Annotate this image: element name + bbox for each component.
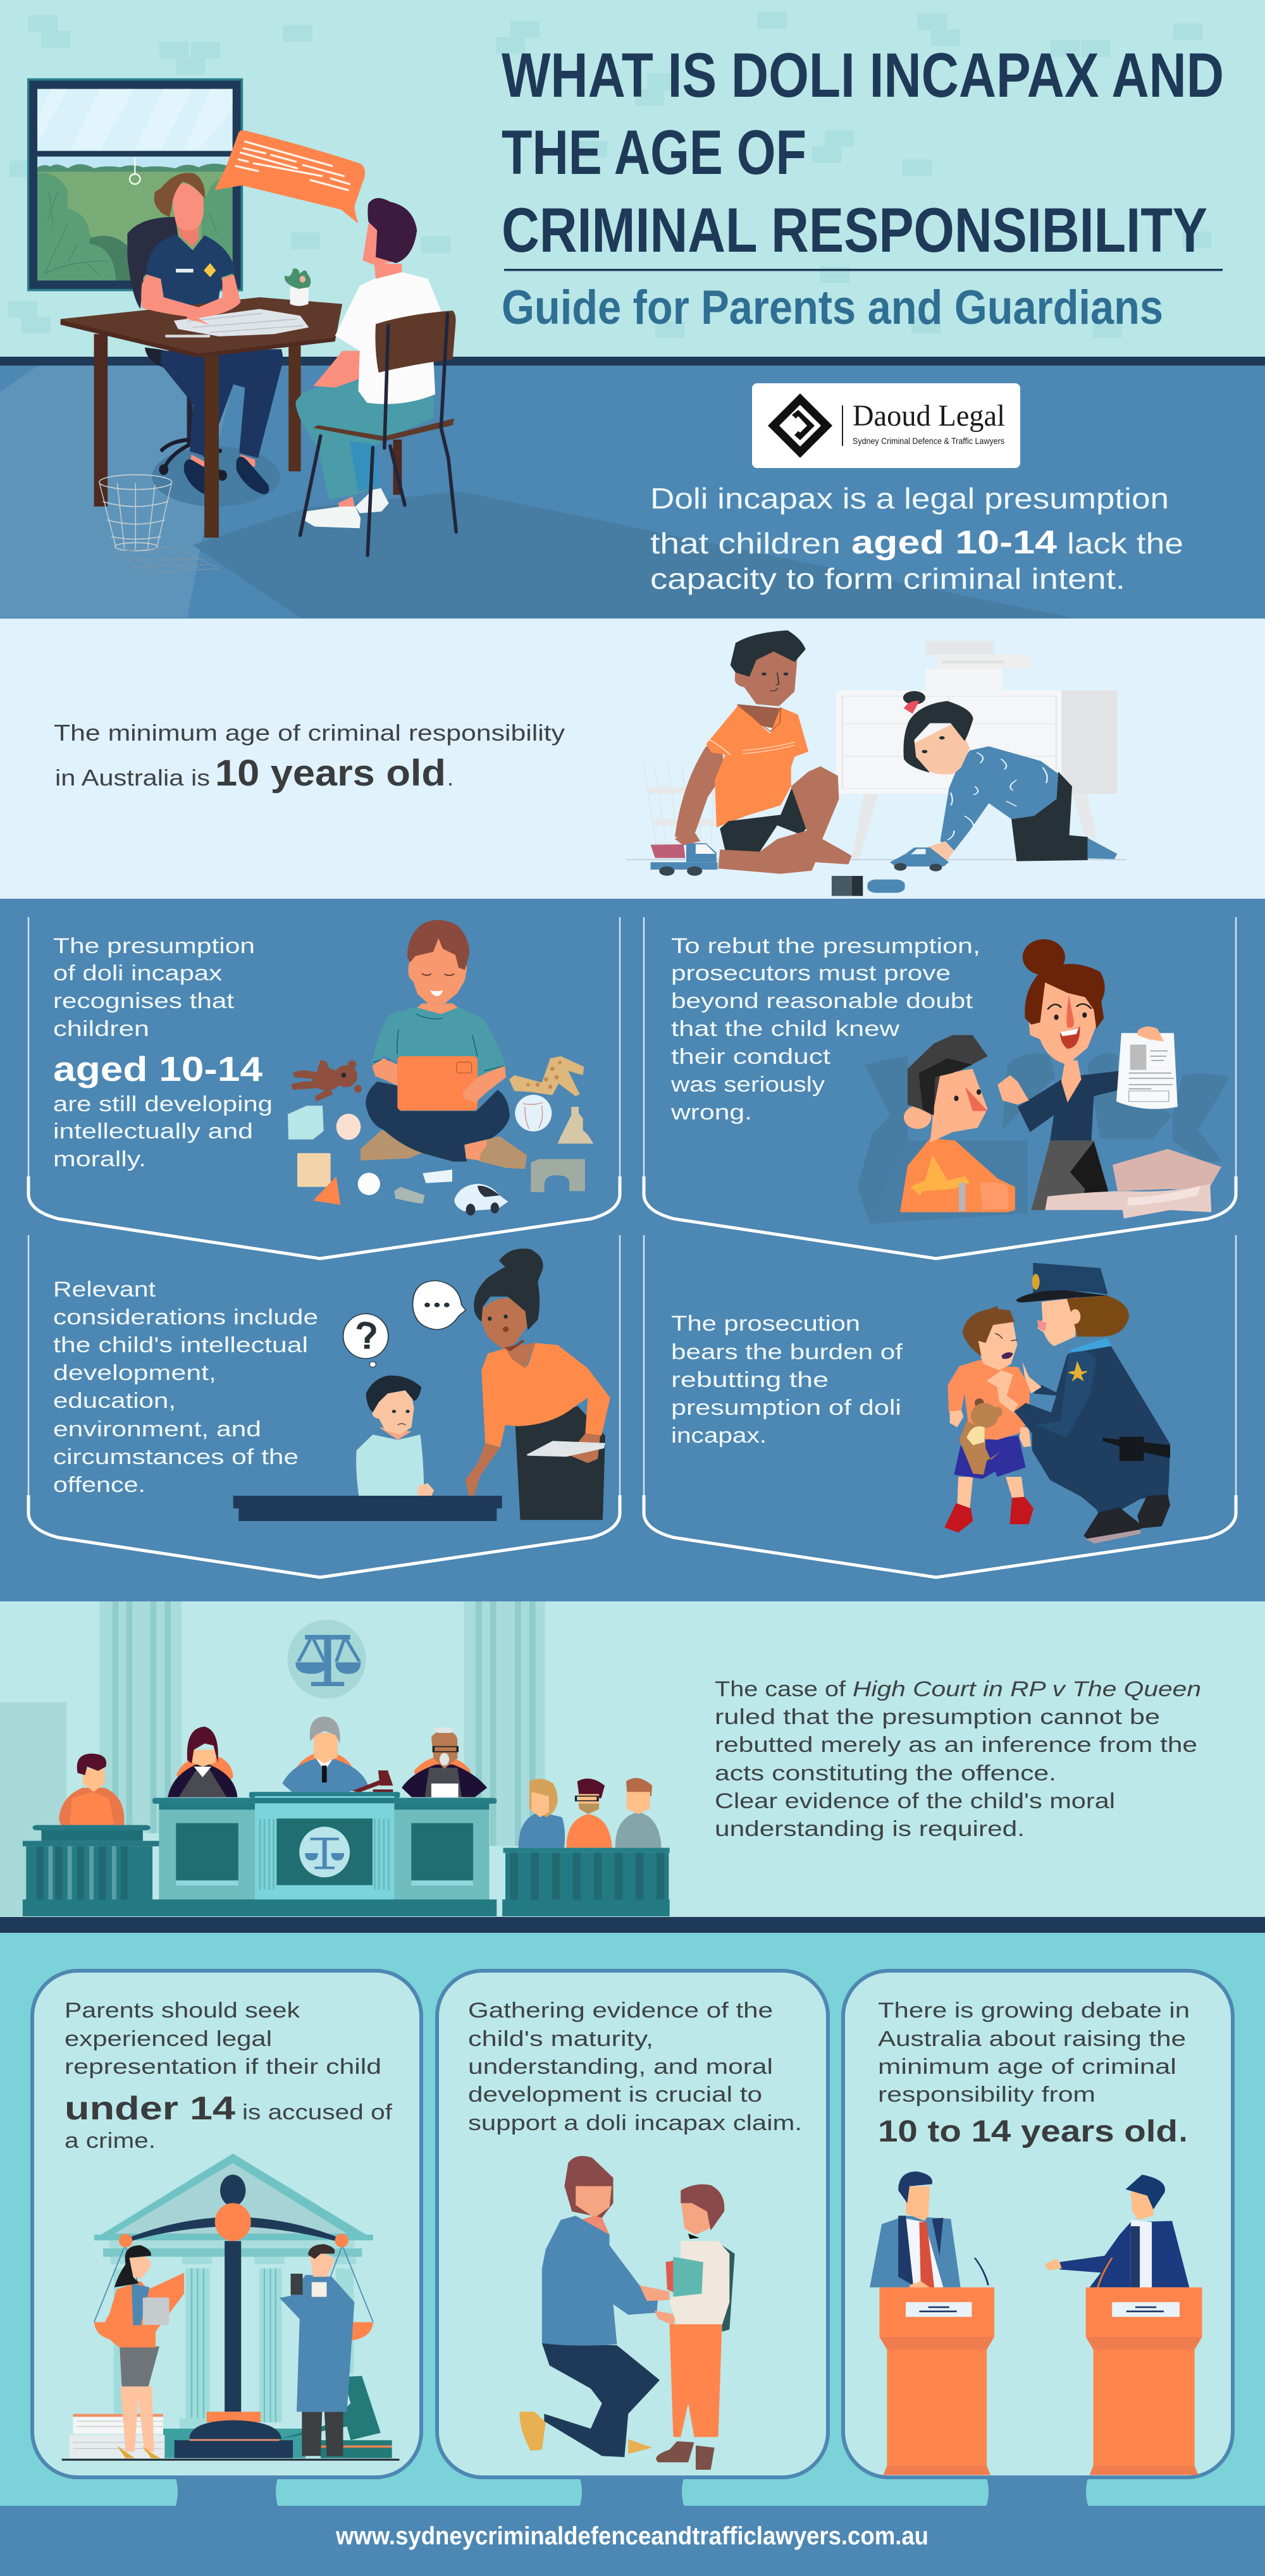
text: to rebut: To rebut the presumption, xyxy=(671,934,980,958)
text: presumption: The presumption xyxy=(53,934,255,958)
illustration: scales of justice with lawyers xyxy=(62,2154,399,2461)
illustration: teacher and student xyxy=(233,1248,610,1521)
text: minimum age of criminal responsibility: in Australia is xyxy=(55,765,210,791)
panel: minimum age xyxy=(0,619,1265,899)
card: rebutting the presumption xyxy=(644,917,1236,1259)
text: to rebut xyxy=(670,934,980,1125)
text: presumption: aged 10-14 xyxy=(53,1049,262,1088)
witness xyxy=(23,1754,160,1900)
speaker one xyxy=(870,2171,988,2288)
card: gather evidence xyxy=(437,1971,828,2477)
subtitle: Guide for Parents and Guardians xyxy=(502,281,1163,335)
text: to rebut: their conduct xyxy=(671,1045,831,1069)
text: High Court in RP v The Queen: acts constituting the offence. xyxy=(715,1761,1056,1785)
text: parents should seek: Parents should seek xyxy=(65,1999,300,2023)
text: relevant considerations: environment, and xyxy=(53,1417,261,1441)
card: growing debate xyxy=(843,1971,1233,2477)
text: doli incapax definition xyxy=(650,482,1183,595)
text: minimum age of criminal responsibility: . xyxy=(447,765,454,791)
card: seek legal representation xyxy=(32,1971,421,2477)
text: minimum age of criminal responsibility: 10 years old xyxy=(215,753,446,794)
text: gathering evidence: development is crucial to xyxy=(468,2083,762,2107)
card: presumption recognises development xyxy=(28,917,620,1259)
furniture xyxy=(626,641,1127,860)
text: parents should seek xyxy=(65,1999,393,2153)
text: prosecution burden: The prosecution xyxy=(671,1312,860,1336)
boy xyxy=(675,631,852,874)
text: minimum age of criminal responsibility xyxy=(54,720,565,794)
text: gathering evidence: Gathering evidence of the xyxy=(468,1999,773,2023)
text: High Court in RP v The Queen: ruled that the presumption cannot be xyxy=(715,1705,1160,1729)
text: to rebut: that the child knew xyxy=(671,1017,900,1041)
text: High Court in RP v The Queen xyxy=(715,1677,1201,1841)
text: growing debate: minimum age of criminal xyxy=(878,2055,1176,2079)
illustrations: lower cards xyxy=(62,2154,1202,2475)
officer xyxy=(987,1263,1170,1544)
logo: Daoud Legal: Daoud Legal xyxy=(853,399,1005,433)
text: growing debate: responsibility from xyxy=(878,2083,1095,2107)
panel: High Court case xyxy=(0,1601,1265,1933)
illustration: boy with tablet and toys xyxy=(288,920,593,1216)
title xyxy=(502,40,1224,271)
text: prosecution burden: bears the burden of xyxy=(671,1340,903,1364)
text: doli incapax definition: capacity to form criminal intent. xyxy=(650,562,1125,595)
columns and wall xyxy=(0,1601,545,1916)
text: growing debate: . xyxy=(1179,2115,1187,2148)
text: gathering evidence: understanding, and moral xyxy=(468,2055,773,2079)
speech bubble: question xyxy=(343,1314,388,1367)
judges' bench xyxy=(23,1792,497,1916)
text: growing debate xyxy=(878,1999,1190,2148)
jury xyxy=(502,1778,670,1916)
illustration: parent and child with book xyxy=(519,2156,735,2470)
speaker two xyxy=(1044,2174,1189,2288)
teddy bear xyxy=(960,1398,1003,1475)
speech bubble xyxy=(214,130,365,224)
text: relevant considerations: development, xyxy=(53,1361,216,1385)
panel: parents and debate cards xyxy=(0,1933,1265,2507)
man in chair xyxy=(296,198,456,555)
text: presumption: morally. xyxy=(53,1147,146,1171)
text: to rebut: beyond reasonable doubt xyxy=(671,989,973,1013)
text: growing debate: 10 to 14 years old xyxy=(878,2115,1178,2148)
text: prosecution burden: incapax. xyxy=(671,1424,767,1448)
text: growing debate: Australia about raising the xyxy=(878,2027,1186,2051)
text: High Court in RP v The Queen: Clear evidence of the child's moral xyxy=(715,1789,1115,1813)
text: gathering evidence xyxy=(468,1999,802,2135)
card: relevant considerations xyxy=(28,1235,620,1577)
illustration: courtroom xyxy=(0,1601,670,1916)
text: parents should seek: representation if their child xyxy=(65,2055,381,2079)
text: relevant considerations: offence. xyxy=(53,1473,145,1497)
text: doli incapax definition: aged 10-14 xyxy=(851,524,1057,561)
speech bubble: dots xyxy=(413,1281,466,1329)
logo: Daoud Legal: Sydney Criminal Defence & Traffic Lawyers xyxy=(853,436,1004,446)
text: relevant considerations: circumstances of the xyxy=(53,1445,299,1469)
text: relevant considerations: the child's intellectual xyxy=(53,1333,308,1357)
judges xyxy=(168,1716,487,1797)
illustration: police officer comforting child xyxy=(944,1263,1170,1544)
text: relevant considerations: considerations include xyxy=(53,1305,318,1329)
waste basket xyxy=(99,475,219,574)
text: presumption: are still developing xyxy=(53,1092,273,1116)
text: doli incapax definition: Doli incapax is a legal presumption xyxy=(650,482,1169,515)
text: prosecution burden: presumption of doli xyxy=(671,1396,901,1420)
text: growing debate: There is growing debate in xyxy=(878,1999,1190,2023)
text: doli incapax definition: lack the xyxy=(1067,527,1183,560)
text: presumption: recognises that xyxy=(53,989,235,1013)
text: minimum age of criminal responsibility: The minimum age of criminal responsibility xyxy=(54,720,565,746)
footer xyxy=(0,2506,1265,2576)
woman lawyer xyxy=(104,2245,184,2458)
text: High Court in RP v The Queen: High Court in RP v The Queen xyxy=(853,1677,1201,1701)
panel: four blue cards xyxy=(0,899,1265,1601)
website url: www.sydneycriminaldefenceandtrafficlawyers.com.au xyxy=(335,2522,929,2550)
text: relevant considerations: education, xyxy=(53,1389,176,1413)
officer xyxy=(127,173,283,507)
text: relevant considerations: Relevant xyxy=(53,1278,156,1302)
text: parents should seek: a crime. xyxy=(65,2129,156,2153)
text: presumption: of doli incapax xyxy=(53,961,222,985)
title: THE AGE OF xyxy=(502,117,806,187)
child xyxy=(944,1306,1034,1532)
text: prosecution burden xyxy=(671,1312,903,1448)
logo: Daoud Legal xyxy=(752,383,1020,468)
podiums xyxy=(880,2288,1202,2475)
text: High Court in RP v The Queen: understanding is required. xyxy=(715,1817,1025,1841)
text: High Court in RP v The Queen: rebutted merely as an inference from the xyxy=(715,1733,1197,1757)
text: doli incapax definition: that children xyxy=(650,527,841,560)
illustration: children playing xyxy=(626,631,1127,896)
text: gathering evidence: child's maturity, xyxy=(468,2027,653,2051)
illustration: prosecutor with document and boy xyxy=(858,939,1229,1224)
text: relevant considerations xyxy=(53,1278,318,1497)
text: parents should seek: experienced legal xyxy=(65,2027,272,2051)
text: parents should seek: is accused of xyxy=(242,2100,393,2124)
teddy bear toy xyxy=(291,1060,362,1102)
panel: hero header xyxy=(0,0,1265,619)
text: to rebut: was seriously xyxy=(670,1073,825,1097)
text: parents should seek: under 14 xyxy=(65,2090,235,2127)
window xyxy=(27,78,243,291)
connector tabs xyxy=(175,2476,1089,2507)
male lawyer xyxy=(280,2244,354,2456)
text: presumption: intellectually and xyxy=(53,1119,253,1143)
girl xyxy=(903,691,1117,862)
scales emblem xyxy=(288,1620,366,1699)
text: prosecution burden: rebutting the xyxy=(671,1368,829,1392)
text: to rebut: wrong. xyxy=(670,1100,752,1125)
text: gathering evidence: support a doli incapax claim. xyxy=(468,2111,802,2135)
text: presumption: children xyxy=(53,1017,149,1041)
illustration: debate podiums xyxy=(870,2171,1202,2475)
desk xyxy=(61,268,342,538)
toy trucks and blocks xyxy=(651,834,949,896)
text: presumption xyxy=(53,934,273,1171)
text: to rebut: prosecutors must prove xyxy=(671,961,951,985)
text: High Court in RP v The Queen: The case of xyxy=(715,1677,846,1701)
card: prosecution burden xyxy=(644,1235,1236,1577)
illustration: police officer interviewing a man xyxy=(27,78,456,574)
